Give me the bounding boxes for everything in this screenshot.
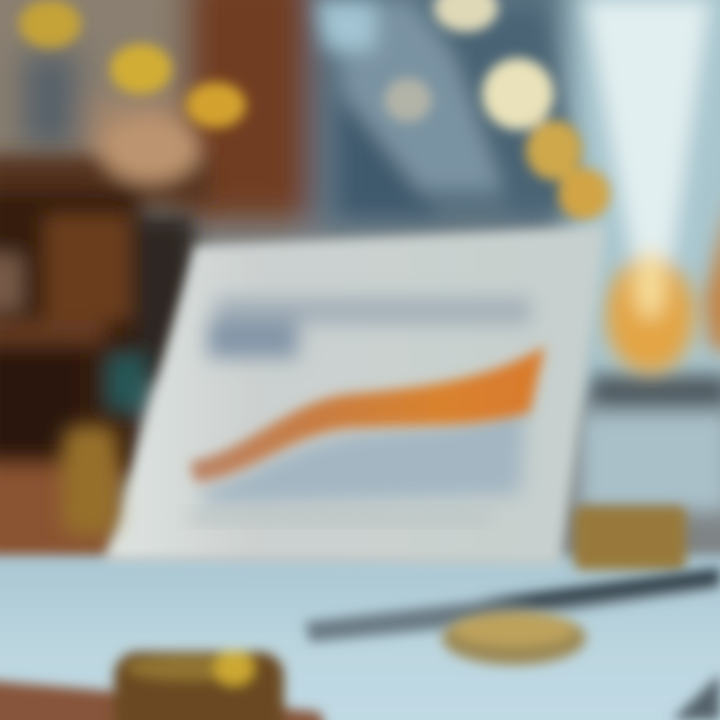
coin on the table [442,611,586,665]
shelf: dark wood at left [0,118,210,570]
blurred heading on the sheet [208,298,530,358]
dark object in bottom-right corner [672,674,720,720]
paper sheet with chart [105,226,606,565]
coin stack: bottom [114,651,284,720]
pen on the table [305,568,720,642]
area under the line [200,400,526,505]
table surface [0,555,720,720]
orange trend line [190,346,545,482]
bokeh lights [19,0,610,220]
building glass streaks [315,0,580,215]
lower faint axis [190,510,490,524]
window light and orange glow at right [580,0,720,512]
coin stack: left [62,425,118,535]
table edge bottom-left [0,680,330,720]
coin stack: right [574,506,686,570]
